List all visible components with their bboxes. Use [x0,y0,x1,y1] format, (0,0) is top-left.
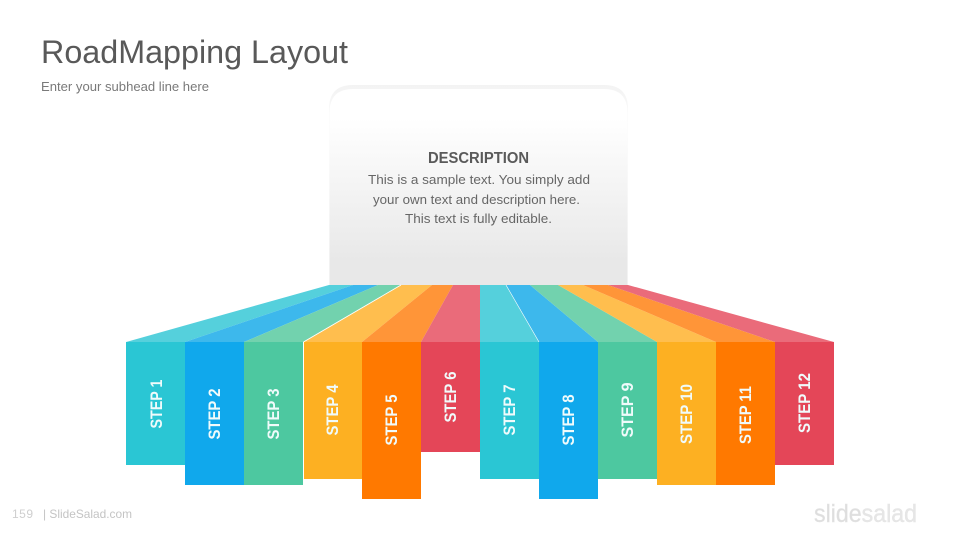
step 7: STEP 7 [500,384,519,436]
logo: slidesalad wordmark: slidesalad [814,500,917,528]
step 8: STEP 8 [559,394,578,446]
step 7 [480,342,539,479]
step 9: STEP 9 [618,382,637,438]
description text: your own text and description here. [373,192,580,207]
step 4 [304,342,362,479]
step 5 [362,342,421,499]
description text: This text is fully editable. [405,211,552,226]
step 9 [598,342,657,479]
step 3 [244,342,303,485]
title: RoadMapping Layout [41,34,348,70]
step 1: STEP 1 [147,380,166,428]
step 6 [421,342,480,452]
step 12 [775,342,834,465]
step 3: STEP 3 [264,388,283,440]
step 10 [657,342,716,485]
description heading: DESCRIPTION [428,150,529,167]
step 11: STEP 11 [736,386,755,444]
step 2: STEP 2 [205,388,224,440]
step 1 [126,342,185,465]
step 11 [716,342,775,485]
step 5: STEP 5 [382,394,401,446]
step 10: STEP 10 [677,384,696,444]
description text [368,172,590,226]
step 4: STEP 4 [323,384,342,436]
step 6: STEP 6 [441,372,460,422]
step 2 [185,342,244,485]
subtitle: Enter your subhead line here [41,79,209,94]
footer text: | SlideSalad.com [43,507,132,521]
description text: This is a sample text. You simply add [368,172,590,187]
step 8 [539,342,598,499]
perspective fan connecting the card to the steps [126,285,834,342]
page number: 159 [12,507,33,521]
panel: description card [329,85,628,285]
step 12: STEP 12 [795,373,814,433]
